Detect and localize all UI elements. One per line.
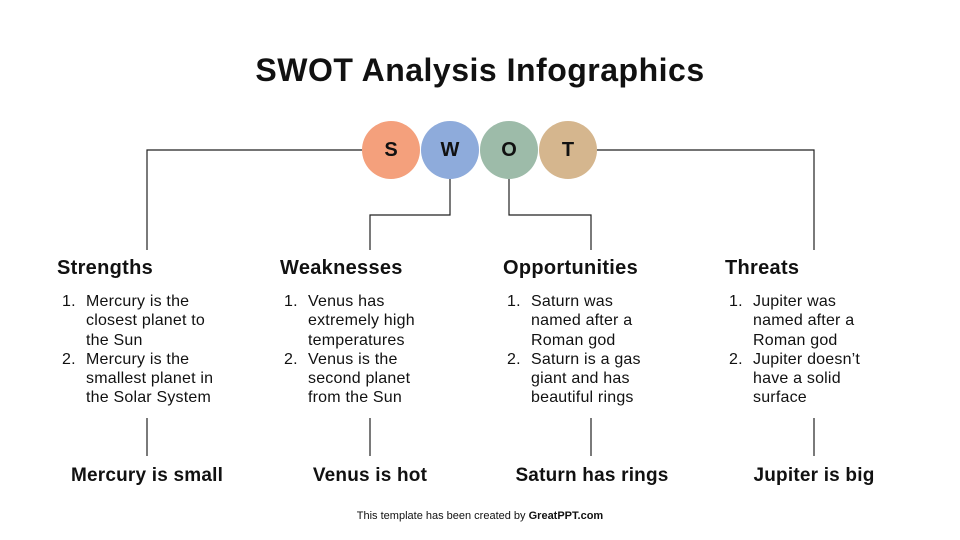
list: weaknesses: 2.	[284, 351, 298, 368]
circles: SWOT: S	[384, 139, 398, 161]
list: threats: Jupiter doesn’t	[753, 351, 860, 368]
circles: SWOT: O	[501, 139, 517, 161]
list: threats: surface	[753, 389, 807, 406]
list: opportunities: Saturn is a gas	[531, 351, 641, 368]
list: threats: 2.	[729, 351, 743, 368]
list: opportunities	[507, 293, 641, 406]
list: threats	[729, 293, 860, 406]
footer: This template has been created by GreatPPT.com	[357, 510, 603, 522]
circles: SWOT: T	[562, 139, 574, 161]
list: threats: 1.	[729, 293, 743, 310]
list: threats: named after a	[753, 312, 854, 329]
list: threats: Roman god	[753, 332, 838, 349]
list: weaknesses: second planet	[308, 370, 410, 387]
list: threats: Jupiter was	[753, 293, 836, 310]
list: strengths: the Solar System	[86, 389, 211, 406]
list: strengths: smallest planet in	[86, 370, 213, 387]
list: opportunities: Saturn was	[531, 293, 613, 310]
list: opportunities: Roman god	[531, 332, 616, 349]
label: Saturn has rings: Saturn has rings	[515, 465, 669, 486]
heading: Strengths: Strengths	[57, 257, 153, 279]
list: strengths: 2.	[62, 351, 76, 368]
title: SWOT Analysis Infographics	[255, 52, 705, 88]
heading: Threats: Threats	[725, 257, 799, 279]
circles: SWOT	[362, 121, 597, 179]
heading: Opportunities: Opportunities	[503, 257, 638, 279]
list: weaknesses: temperatures	[308, 332, 405, 349]
list: strengths: Mercury is the	[86, 351, 189, 368]
list: opportunities: giant and has	[531, 370, 630, 387]
list: opportunities: beautiful rings	[531, 389, 634, 406]
list: weaknesses: 1.	[284, 293, 298, 310]
list: strengths: Mercury is the	[86, 293, 189, 310]
list: weaknesses: from the Sun	[308, 389, 402, 406]
list: weaknesses: Venus is the	[308, 351, 398, 368]
list: weaknesses: extremely high	[308, 312, 415, 329]
label: Mercury is small: Mercury is small	[71, 465, 223, 486]
list: opportunities: named after a	[531, 312, 632, 329]
circles: SWOT: W	[441, 139, 459, 161]
list: weaknesses	[284, 293, 415, 406]
label: Venus is hot: Venus is hot	[313, 465, 427, 486]
list: strengths	[62, 293, 213, 406]
list: strengths: closest planet to	[86, 312, 205, 329]
list: opportunities: 1.	[507, 293, 521, 310]
list: threats: have a solid	[753, 370, 841, 387]
heading: Weaknesses: Weaknesses	[280, 257, 403, 279]
list: opportunities: 2.	[507, 351, 521, 368]
list: strengths: the Sun	[86, 332, 143, 349]
list: strengths: 1.	[62, 293, 76, 310]
list: weaknesses: Venus has	[308, 293, 385, 310]
label: Jupiter is big: Jupiter is big	[753, 465, 875, 486]
